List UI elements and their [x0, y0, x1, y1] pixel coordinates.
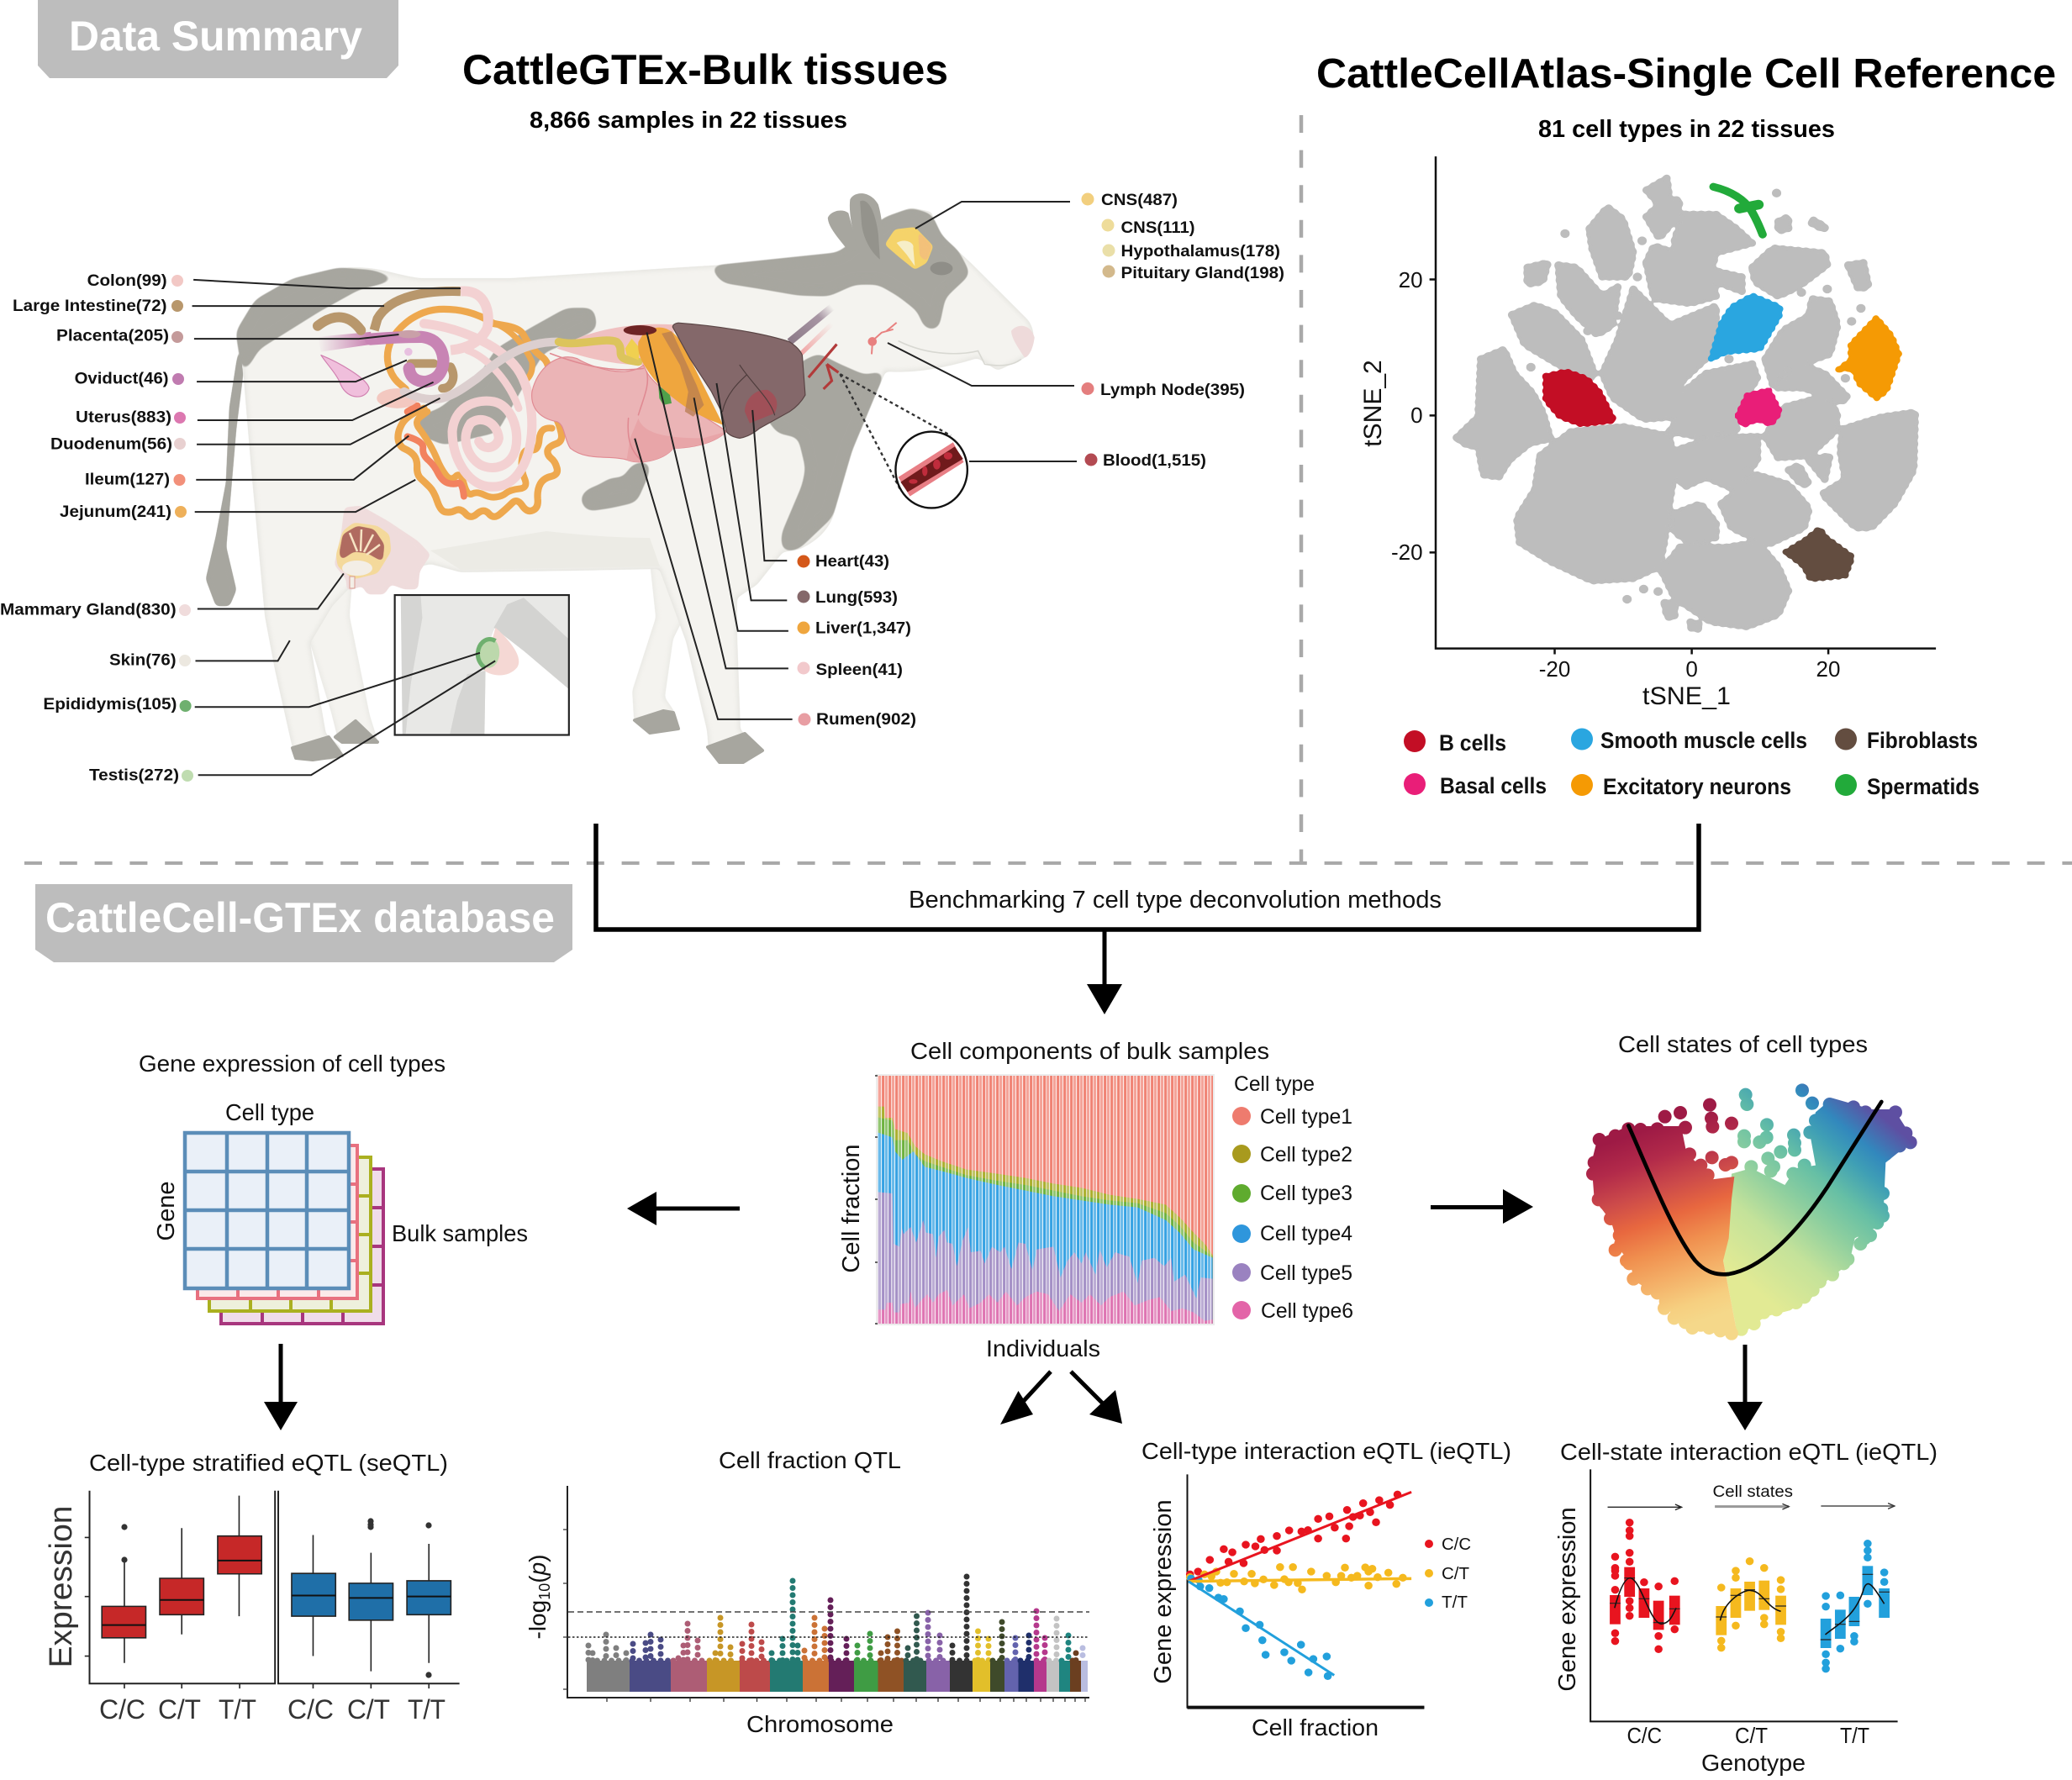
organ: rumen contour lines — [551, 354, 647, 462]
legend: cell types: Cell type5 — [1260, 1261, 1352, 1285]
heading: cell-type ieQTL: Cell-type interaction eQTL (ieQTL) — [1141, 1438, 1511, 1464]
cluster: Basal cells — [1737, 390, 1780, 425]
icon: nose — [1011, 326, 1035, 357]
legend: tSNE cell types: Excitatory neurons — [1603, 774, 1791, 799]
manhattan: chromosome bars — [587, 1661, 1088, 1692]
organ: ileum — [408, 436, 464, 497]
boxplot: y axis title: Expression — [44, 1506, 79, 1667]
boxplot: whiskers — [124, 1496, 429, 1672]
tSNE: x axis title: tSNE_1 — [1642, 682, 1731, 710]
heading: cell fraction QTL: Cell fraction QTL — [719, 1447, 901, 1473]
matrix: back layer magenta — [221, 1169, 383, 1324]
arrow: diagonal to cell fraction QTL — [1000, 1372, 1051, 1425]
tSNE: small grey dots — [1526, 189, 1865, 603]
label: Cell type: Cell type — [225, 1099, 314, 1125]
labels: head tissues: CNS(487) — [1101, 192, 1178, 209]
heading: seQTL: Cell-type stratified eQTL (seQTL) — [89, 1450, 448, 1476]
ieQTL: axes — [1188, 1474, 1424, 1708]
arrow: left to matrix — [627, 1192, 740, 1225]
heading: cell states: Cell states of cell types — [1618, 1031, 1868, 1057]
label: Bulk samples: Bulk samples — [392, 1220, 528, 1246]
organ: small brown intestine part — [318, 317, 361, 330]
state ieQTL: direction arrows — [1608, 1504, 1682, 1510]
inset: testis — [478, 637, 499, 668]
icon: front ear — [850, 193, 883, 266]
tSNE: tick labels: 20 — [1399, 267, 1423, 292]
legend: cell types: Cell type1 — [1260, 1105, 1352, 1129]
ieQTL: T/T points — [1187, 1575, 1331, 1680]
arrow: right to cell states — [1431, 1189, 1533, 1224]
title: CattleCellAtlas: CattleCellAtlas-Single Cell Reference — [1316, 51, 2056, 97]
manhattan: threshold lines — [568, 1611, 1089, 1613]
ieQTL: legend: T/T — [1442, 1593, 1468, 1612]
illustration: cow anatomy — [206, 193, 1035, 762]
labels: left tissues — [0, 272, 193, 785]
organ: jejunum middle strand — [491, 322, 532, 382]
cluster: Spermatids — [1713, 187, 1763, 234]
organ: jejunum inner loop — [417, 412, 552, 498]
labels: right tissues: Heart(43) — [815, 553, 889, 571]
organ: liver — [638, 328, 723, 425]
manhattan: y axis title: 10 — [536, 1583, 553, 1600]
chart: stratified eQTL box plots — [44, 1491, 460, 1725]
boxplot: genotype labels: T/T — [408, 1694, 446, 1725]
labels: left tissues: Epididymis(105) — [43, 696, 177, 714]
title: CattleGTEx-Bulk tissues: CattleGTEx-Bulk tissues — [462, 46, 948, 93]
cow: body silhouette — [244, 208, 1033, 762]
cluster: Excitatory neurons — [1838, 318, 1899, 398]
banner: Data Summary — [38, 0, 398, 78]
heading: cell components: Cell components of bulk samples — [910, 1038, 1269, 1064]
manhattan: y axis title: ( — [525, 1575, 551, 1583]
stack: pink cell type6 — [878, 1290, 1213, 1324]
organ: rumen — [532, 357, 726, 462]
organ: jejunum upper loop — [388, 309, 493, 389]
stack: blue cell type4 — [878, 1132, 1213, 1324]
stack: individual sample stripes — [878, 1076, 1213, 1324]
heading: gene expression of cell types: Gene expression of cell types — [139, 1051, 446, 1077]
stack: olive cell type2 — [878, 1107, 1213, 1324]
tSNE: tick labels: -20 — [1539, 656, 1570, 682]
labels: right tissues: Liver(1,347) — [815, 620, 911, 637]
organ: fallopian fade — [318, 332, 371, 352]
cow: grey patches — [236, 208, 970, 551]
boxplot: genotype labels: T/T — [219, 1694, 256, 1725]
boxplot: genotype labels: C/C — [287, 1694, 334, 1725]
organ: rectum brown — [411, 363, 453, 388]
legend: tSNE cell types: Basal cells — [1440, 773, 1547, 798]
boxplot: outliers — [121, 1518, 432, 1678]
labels: left tissues: Jejunum(241) — [60, 503, 171, 521]
organ: oviduct drop — [321, 355, 369, 397]
cow: hooves — [293, 711, 762, 762]
labels: left tissues: Skin(76) — [109, 652, 177, 669]
organ: yellow duodenum — [559, 340, 638, 361]
organ: trachea — [789, 307, 832, 342]
stack: green cell type3 — [878, 1117, 1213, 1324]
tSNE: tick labels: 0 — [1685, 656, 1698, 682]
banner: CattleCell-GTEx database: CattleCell-GTEx database — [45, 894, 555, 941]
boxplot: blue boxes — [292, 1573, 451, 1620]
labels: left tissues: Ileum(127) — [85, 471, 170, 489]
state ieQTL: blue bars — [1821, 1566, 1890, 1648]
organ: gall bladder — [658, 385, 672, 405]
inset: thigh shape — [493, 596, 569, 689]
manhattan: axes — [567, 1486, 1089, 1698]
organ: placenta — [398, 330, 420, 338]
icon: zoom lines — [840, 374, 951, 489]
cow: far legs — [309, 555, 698, 742]
subtitle: cell types count: 81 cell types in 22 tissues — [1538, 116, 1835, 143]
subtitle: samples count: 8,866 samples in 22 tissues — [530, 107, 847, 133]
legend: cell types — [1232, 1072, 1353, 1323]
state ieQTL: yellow bars — [1716, 1581, 1786, 1635]
state ieQTL: genotype labels: T/T — [1840, 1723, 1869, 1748]
ieQTL: fit lines — [1189, 1492, 1411, 1582]
icon: jaw shading — [899, 341, 1021, 366]
matrix: cell type by gene by bulk samples — [185, 1133, 383, 1324]
cluster: Smooth muscle cells — [1711, 295, 1780, 359]
text: benchmarking methods: Benchmarking 7 cell type deconvolution methods — [909, 887, 1442, 914]
labels: left tissues: Oviduct(46) — [75, 371, 169, 388]
chart: cell-type interaction eQTL — [1150, 1474, 1471, 1741]
tSNE: tick labels: -20 — [1391, 540, 1423, 565]
stack: salmon cell type1 — [878, 1076, 1213, 1324]
labels: right tissues: Spleen(41) — [815, 661, 903, 679]
labels: left tissues: Uterus(883) — [76, 409, 171, 427]
legend: cell types: Cell type4 — [1260, 1222, 1352, 1245]
inset: epididymis — [477, 640, 495, 668]
labels: left tissues: Colon(99) — [87, 272, 167, 290]
labels: left tissues: Duodenum(56) — [50, 435, 172, 454]
cluster: B cells — [1545, 371, 1615, 424]
banner: Data Summary: Data Summary — [69, 13, 362, 60]
organ: second colon strand — [467, 350, 519, 408]
labels: left tissues: Large Intestine(72) — [13, 298, 166, 315]
label: Cell fraction: Cell fraction — [838, 1144, 865, 1273]
organ: pink lobe — [377, 388, 418, 408]
icon: eye — [931, 262, 952, 275]
tSNE: axes — [1430, 156, 1936, 654]
state ieQTL: genotype labels: C/C — [1627, 1723, 1662, 1748]
labels: left tissues: Mammary Gland(830) — [0, 602, 177, 619]
ieQTL: C/T points — [1186, 1563, 1407, 1593]
organ: spiral colon — [424, 324, 532, 487]
manhattan: y axis title: -log — [525, 1600, 551, 1639]
organ: uterus — [371, 337, 443, 382]
inset: scrotum — [484, 628, 519, 676]
matrix: layer pink — [198, 1145, 357, 1298]
matrix: layer olive — [209, 1157, 371, 1311]
labels: head tissues: Hypothalamus(178) — [1121, 243, 1280, 261]
cow: udder and mammary gland — [335, 506, 430, 594]
ieQTL: legend: C/C — [1442, 1535, 1471, 1554]
state ieQTL: yellow points — [1717, 1557, 1785, 1651]
organ: heart — [745, 390, 777, 424]
inset: leg shape — [401, 596, 510, 734]
labels: left tissues: Placenta(205) — [56, 328, 169, 345]
organ: duodenum tube — [404, 342, 557, 399]
state ieQTL: smooth curves — [1615, 1578, 1676, 1624]
arrow: diagonal to cell-type ieQTL — [1071, 1372, 1122, 1424]
labels: right tissues: Rumen(902) — [816, 711, 916, 729]
chart: Manhattan plot of cell fraction QTL — [525, 1486, 1089, 1737]
icon: lymph node — [868, 323, 897, 354]
legend: tSNE cell types: B cells — [1439, 730, 1506, 756]
state ieQTL: genotype labels: C/T — [1735, 1723, 1768, 1748]
stack: purple cell type5 — [878, 1192, 1213, 1324]
tSNE: grey background clusters — [1457, 178, 1915, 629]
labels: left tissues: Testis(272) — [89, 767, 179, 785]
label: Gene: Gene — [153, 1182, 180, 1240]
cow: head details — [809, 193, 1035, 508]
state ieQTL: medians — [1610, 1574, 1890, 1640]
inset: testis close-up — [395, 595, 569, 735]
cow: tail — [206, 343, 243, 606]
legend: cell types: Cell type2 — [1260, 1143, 1352, 1166]
organ: jejunum outer — [398, 324, 561, 517]
manhattan: significant SNP dots — [588, 1577, 1083, 1661]
icon: back ear — [828, 211, 858, 251]
ieQTL: x axis title: Cell fraction — [1252, 1714, 1379, 1741]
organ: spleen dark — [624, 325, 656, 335]
scatter: right lobe cells — [1723, 1083, 1917, 1336]
chart: stacked cell fractions — [875, 1074, 1215, 1325]
state ieQTL: genotype labels — [1627, 1723, 1869, 1748]
boxplot: genotype labels: C/T — [347, 1694, 390, 1725]
organ: rumen lower — [627, 419, 726, 462]
boxplot: axes — [90, 1491, 460, 1683]
manhattan: y axis title: p) — [525, 1555, 551, 1575]
chart: tSNE clusters — [1359, 156, 1936, 710]
state ieQTL: blue points — [1822, 1540, 1888, 1672]
legend: cell types: Cell type — [1234, 1072, 1315, 1096]
stack: y ticks — [875, 1076, 878, 1324]
organ: lung — [672, 323, 805, 438]
state ieQTL: x axis title: Genotype — [1701, 1750, 1806, 1776]
icon: blood vessels — [809, 345, 838, 389]
icon: brain — [885, 227, 933, 270]
scatter: left lobe cells — [1586, 1098, 1738, 1340]
heading: cell-state ieQTL: Cell-state interaction eQTL (ieQTL) — [1560, 1439, 1938, 1465]
ieQTL: y axis title: Gene expression — [1150, 1499, 1177, 1684]
matrix: front layer blue — [185, 1133, 349, 1288]
state ieQTL: red bars — [1610, 1567, 1680, 1630]
legend: tSNE cell types: Smooth muscle cells — [1600, 728, 1807, 753]
boxplot: genotype labels: C/C — [99, 1694, 145, 1725]
cow: belly shading — [430, 531, 660, 570]
arrow: cell states down — [1727, 1345, 1763, 1430]
state ieQTL: cell states label: Cell states — [1713, 1483, 1793, 1501]
labels: head tissues: CNS(111) — [1121, 219, 1195, 237]
organ: large intestine — [374, 292, 461, 330]
ieQTL: legend — [1425, 1535, 1471, 1612]
chart: cell-state interaction eQTL — [1554, 1469, 1898, 1776]
ieQTL: C/C points — [1186, 1491, 1401, 1578]
labels: head tissues: Pituitary Gland(198) — [1121, 265, 1284, 282]
chart: cell states trajectory — [1586, 1083, 1917, 1340]
cow: internal organs — [318, 291, 832, 517]
legend: cell types: Cell type6 — [1261, 1299, 1353, 1323]
boxplot: red boxes — [102, 1536, 261, 1638]
state ieQTL: y axis title: Gene expression — [1554, 1507, 1581, 1692]
manhattan: x axis title: Chromosome — [746, 1711, 894, 1737]
tSNE: coloured clusters — [1545, 187, 1899, 579]
leader lines: head labels — [888, 202, 1077, 461]
banner: CattleCell-GTEx database — [35, 884, 572, 962]
labels: head tissues — [1081, 192, 1284, 470]
tSNE: tick labels: 0 — [1410, 403, 1423, 428]
organ: colon — [451, 291, 488, 350]
tSNE: tick labels: 20 — [1816, 656, 1840, 682]
ieQTL: legend: C/T — [1442, 1565, 1469, 1583]
state ieQTL: red points — [1611, 1519, 1679, 1653]
state ieQTL: axes — [1590, 1469, 1898, 1721]
bracket: benchmarking connector — [596, 824, 1699, 1014]
legend: cell types: Cell type3 — [1260, 1182, 1352, 1205]
labels: head tissues: Blood(1,515) — [1103, 452, 1206, 470]
legend: tSNE cell types: Spermatids — [1867, 774, 1980, 799]
tSNE: tick labels — [1391, 267, 1840, 682]
labels: head tissues: Lymph Node(395) — [1100, 382, 1245, 399]
labels: right tissues: Lung(593) — [815, 589, 898, 607]
arrow: matrix down to seQTL — [264, 1344, 298, 1430]
boxplot: genotype labels: C/T — [158, 1694, 201, 1725]
labels: right tissues — [797, 553, 916, 729]
tSNE: y axis title: tSNE_2 — [1359, 360, 1387, 447]
leader lines from tissues to labels — [192, 280, 793, 775]
curve: trajectory — [1628, 1102, 1881, 1274]
boxplot: genotype labels — [99, 1694, 446, 1725]
boxplot: medians — [102, 1561, 451, 1625]
label: Individuals: Individuals — [986, 1335, 1100, 1361]
legend: tSNE cell types: Fibroblasts — [1867, 728, 1978, 753]
organ: stomach back — [557, 324, 677, 368]
icon: blood inset — [895, 432, 967, 508]
legend: tSNE cell types — [1404, 728, 1980, 799]
cluster: Fibroblasts — [1785, 529, 1853, 579]
